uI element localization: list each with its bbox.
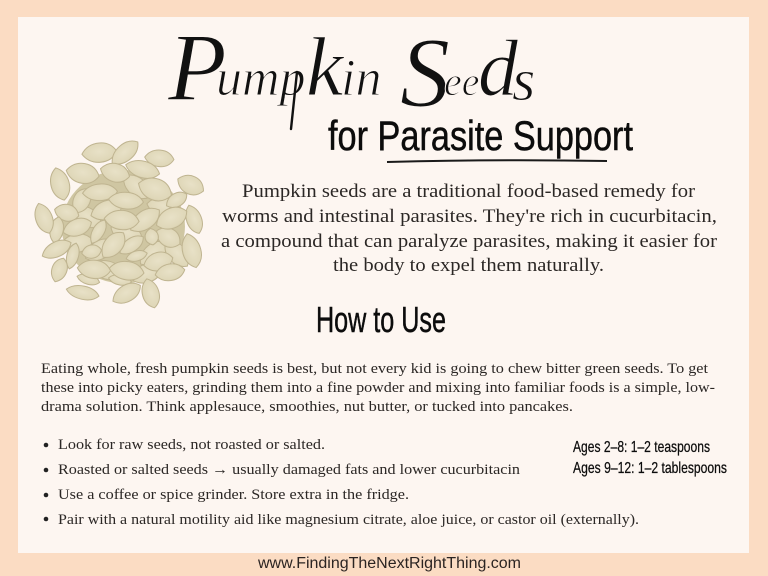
title: Pumpkin Seeds: in — [341, 50, 394, 107]
usage paragraph: these into picky eaters, grinding them into a fine powder and mixing into familiar foods is a simple, low- — [41, 380, 715, 396]
usage paragraph — [41, 361, 715, 415]
heading: How to Use: How to Use — [316, 299, 446, 340]
intro paragraph: a compound that can paralyze parasites, making it easier for — [221, 231, 718, 252]
title: Pumpkin Seeds: d — [478, 25, 519, 113]
subtitle: for Parasite Support: for Parasite Support — [328, 112, 633, 159]
title: Pumpkin Seeds — [167, 14, 535, 129]
intro paragraph: worms and intestinal parasites. They're rich in cucurbitacin, — [222, 206, 717, 227]
bullet list: Roasted or salted seeds → usually damaged fats and lower cucurbitacin — [58, 462, 521, 478]
title: Pumpkin Seeds: s — [512, 47, 535, 113]
intro paragraph: the body to expel them naturally. — [333, 255, 604, 276]
dosage by age: Ages 2–8: 1–2 teaspoons — [573, 439, 710, 456]
intro paragraph — [221, 181, 718, 276]
usage paragraph: Eating whole, fresh pumpkin seeds is best, but not every kid is going to chew bitter green seeds. To get — [41, 361, 709, 377]
image: pile of pumpkin seeds — [31, 136, 207, 310]
title: Pumpkin Seeds: k — [306, 21, 345, 114]
title: Pumpkin Seeds: S — [400, 17, 450, 128]
usage paragraph: drama solution. Think applesauce, smoothies, nut butter, or tucked into pancakes. — [41, 399, 573, 415]
footer website: www.FindingTheNextRightThing.com — [257, 555, 521, 572]
bullet list: Use a coffee or spice grinder. Store extra in the fridge. — [58, 487, 409, 503]
subtitle underline — [387, 160, 607, 162]
title: Pumpkin Seeds: P — [167, 14, 227, 121]
bullet list: Look for raw seeds, not roasted or salted. — [58, 437, 325, 453]
title: Pumpkin Seeds: ee — [444, 59, 480, 104]
bullet list: Pair with a natural motility aid like magnesium citrate, aloe juice, or castor oil (externally). — [58, 512, 639, 528]
dosage by age — [573, 439, 727, 477]
bullet list — [44, 437, 639, 528]
intro paragraph: Pumpkin seeds are a traditional food-based remedy for — [242, 181, 696, 202]
title: Pumpkin Seeds: ump — [216, 50, 306, 107]
